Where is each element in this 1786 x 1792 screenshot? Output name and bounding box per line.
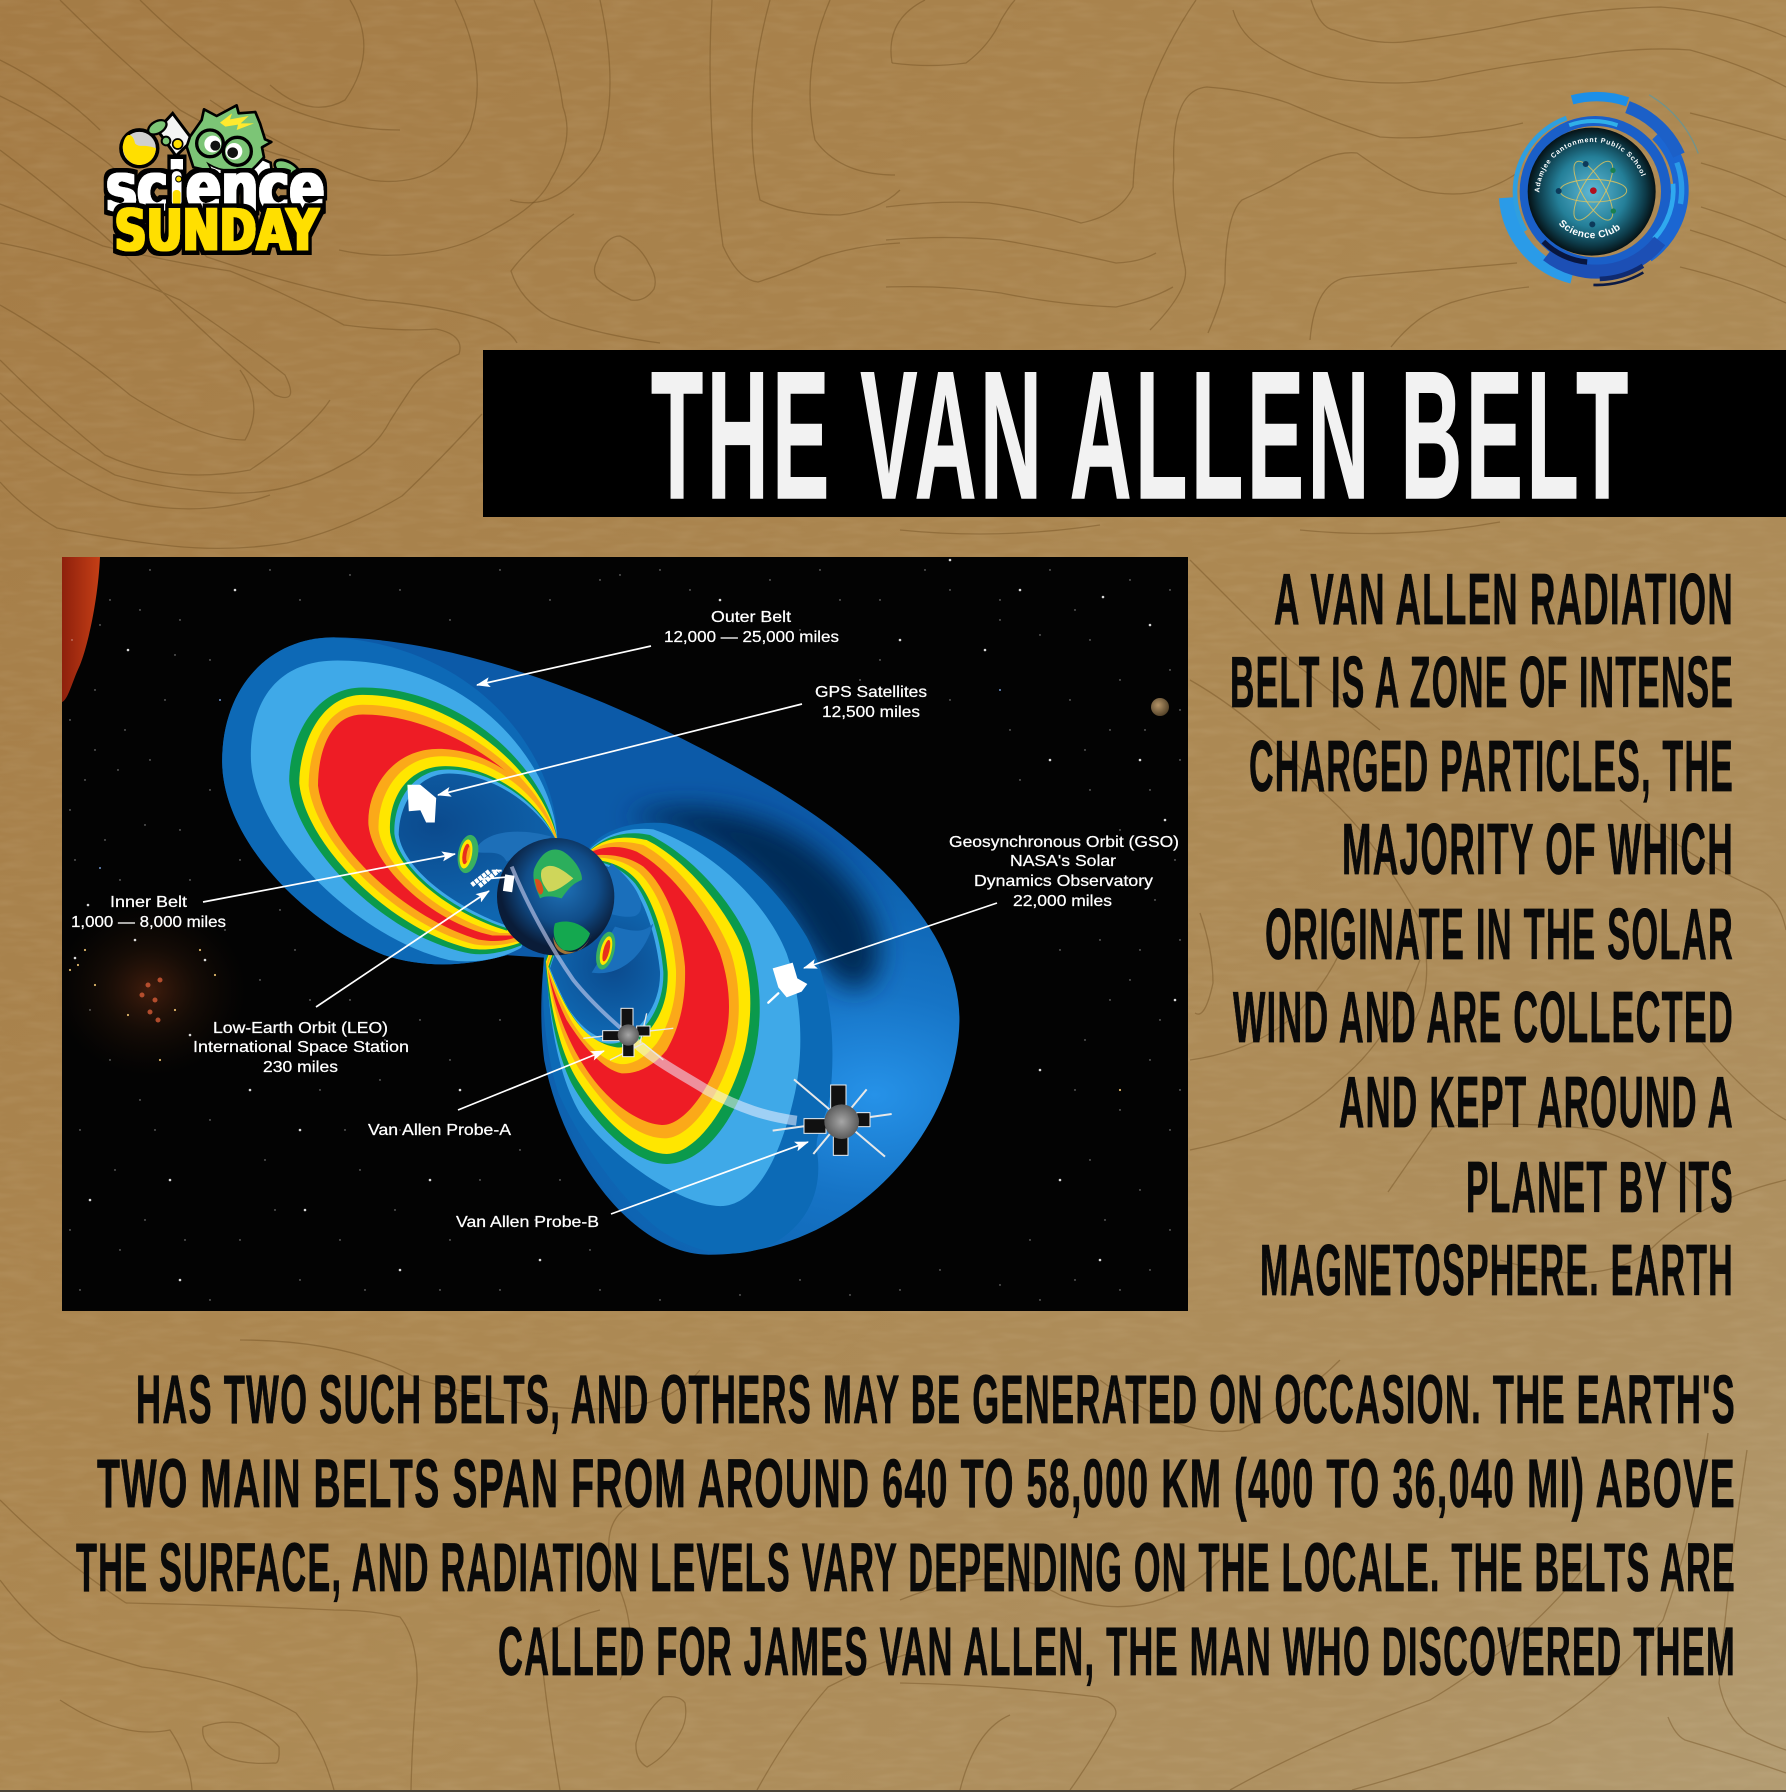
right lobe: inner green	[548, 859, 668, 1047]
starfield	[70, 560, 1180, 1300]
title banner	[483, 333, 1786, 537]
arrow: GPS satellites	[438, 704, 802, 795]
icon: distant planet	[1151, 698, 1169, 716]
right lobe: hollow core	[550, 860, 660, 1039]
left lobe: band green	[289, 688, 557, 954]
label: low-earth orbit: 230 miles	[263, 1059, 338, 1076]
right lobe: yellow	[546, 838, 750, 1154]
logo: Adamjee Cantonment Public School Science Club: Adamjee Cantonment Public School	[1534, 138, 1646, 192]
wordmark: SUNDAY: SUNDAY	[115, 198, 319, 264]
logo: Adamjee Cantonment Public School Science Club	[1498, 92, 1699, 286]
label: inner belt: 1,000 — 8,000 miles	[71, 914, 226, 931]
arrow: probe B	[611, 1142, 808, 1214]
icon: mascot	[187, 105, 303, 183]
label: outer belt: 12,000 — 25,000 miles	[664, 629, 839, 646]
arrow: probe A	[458, 1051, 604, 1110]
right lobe: inner light blue	[549, 859, 663, 1044]
text block: bottom description	[76, 1361, 1736, 1690]
label: GPS satellites: 12,500 miles	[822, 704, 920, 721]
left lobe: inner orange	[368, 749, 556, 936]
badge text: Science Club	[1558, 219, 1630, 238]
right lobe: outer dark band	[543, 823, 832, 1254]
right lobe: green	[545, 833, 760, 1164]
nebula	[55, 905, 245, 1075]
left lobe: inner light blue	[394, 770, 556, 928]
left lobe: inner yellow	[378, 756, 556, 933]
left lobe: hollow core	[399, 773, 556, 926]
South America and Antarctica	[553, 934, 592, 954]
inner lobe shading right	[607, 863, 641, 917]
probe orbit track: lower	[627, 1033, 797, 1121]
label: geosynchronous orbit: Geosynchronous Orbit (GSO)	[949, 834, 1179, 851]
left lobe: band light blue	[251, 660, 557, 961]
wordmark: science: science	[106, 149, 325, 227]
label: GPS satellites: GPS Satellites	[815, 684, 927, 701]
right lobe: inner yellow	[547, 857, 676, 1064]
label: outer belt	[664, 609, 839, 646]
right lobe: red	[547, 847, 729, 1125]
left belt cross-section and outer shell	[222, 637, 959, 1255]
label: geosynchronous orbit: NASA's Solar	[1010, 853, 1117, 870]
probe orbit track: upper	[512, 867, 627, 1033]
arrow: outer belt	[477, 646, 651, 685]
label: geosynchronous orbit	[949, 834, 1179, 910]
inner belt right	[592, 923, 653, 973]
North America	[533, 850, 582, 898]
label: inner belt: Inner Belt	[110, 894, 188, 911]
icon: test tube	[171, 170, 183, 207]
icon: GPS satellite	[407, 785, 436, 823]
icon: GSO solar dynamics observatory	[768, 963, 807, 1003]
icon: Van Allen Probe-A	[583, 1008, 673, 1060]
label: geosynchronous orbit: 22,000 miles	[1013, 893, 1112, 910]
inner wall shading	[627, 807, 880, 989]
arrow: geosynchronous orbit	[804, 903, 997, 968]
logo: Science Sunday	[106, 105, 325, 264]
logo rings	[1441, 39, 1746, 344]
label: probe B: Van Allen Probe-B	[456, 1214, 599, 1231]
icon: atom	[1556, 156, 1627, 227]
text block: right column description	[1230, 559, 1734, 1311]
icon: Van Allen Probe-B	[773, 1079, 892, 1157]
label: outer belt: Outer Belt	[711, 609, 792, 626]
bottom edge line	[0, 1790, 1786, 1792]
left lobe: band yellow	[299, 695, 557, 950]
label: probe A: Van Allen Probe-A	[368, 1122, 511, 1139]
label: GPS satellites	[815, 684, 927, 721]
left lobe: band red	[318, 715, 556, 941]
right lobe: inner orange	[547, 855, 685, 1073]
logo: Adamjee Cantonment Public School Science Club: Science Club	[1559, 220, 1620, 238]
badge disc	[1528, 128, 1656, 256]
label: low-earth orbit: Low-Earth Orbit (LEO)	[213, 1020, 388, 1037]
badge text: school name	[1539, 142, 1645, 197]
outer belt body	[222, 637, 959, 1255]
icon: sun edge	[62, 557, 100, 702]
left lobe: dark front band	[222, 637, 557, 964]
icon: flask	[121, 113, 193, 167]
label: geosynchronous orbit: Dynamics Observatory	[974, 873, 1153, 890]
diagram panel: Van Allen belts	[55, 557, 1188, 1311]
right belt cross-section	[455, 807, 892, 1254]
label: inner belt	[71, 894, 226, 931]
label: low-earth orbit: International Space Station	[193, 1039, 409, 1056]
right lobe: light blue	[546, 829, 800, 1206]
right lobe: orange	[547, 842, 739, 1138]
left lobe: band orange	[309, 705, 557, 946]
label: low-earth orbit	[193, 1020, 409, 1076]
left lobe: inner green	[390, 766, 556, 931]
arrow: low-earth orbit	[316, 891, 489, 1007]
icon: ISS	[472, 871, 514, 892]
inner belt left	[455, 832, 552, 875]
arrow: inner belt	[203, 854, 455, 902]
icon: Earth	[497, 838, 614, 955]
